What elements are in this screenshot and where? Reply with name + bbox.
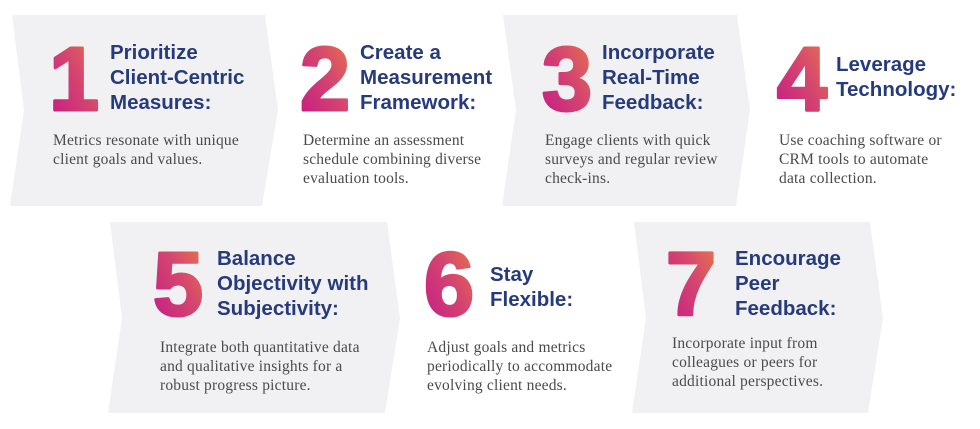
body 4: CRM tools to automate [779,151,928,168]
body 2: schedule combining diverse [303,151,481,168]
body 5: robust progress picture. [160,377,311,394]
title 2: Framework: [360,91,476,114]
body 6 [427,339,612,394]
panel: step 5 background [108,222,400,413]
title 7: Feedback: [735,297,836,320]
step 7 [666,235,841,390]
title 5: Balance [217,247,296,270]
title 1: Prioritize [110,41,198,64]
body 2 [303,132,481,187]
title 6: Stay [490,263,533,286]
body 6: periodically to accommodate [427,358,612,375]
body 4 [779,132,942,187]
title 1: Client-Centric [110,66,244,89]
title 5: Objectivity with [217,272,368,295]
title 7 [735,247,841,320]
body 5 [160,339,360,394]
body 2: evaluation tools. [303,170,409,187]
title 1: Measures: [110,91,211,114]
body 1 [53,132,239,168]
body 6: evolving client needs. [427,377,567,394]
title 4: Leverage [836,53,926,76]
body 3: check-ins. [545,170,610,187]
title 6 [490,263,573,311]
step 1 [49,30,244,168]
body 5: Integrate both quantitative data [160,339,360,356]
body 3 [545,132,718,187]
title 2: Create a [360,41,441,64]
title 5: Subjectivity: [217,297,339,320]
panel: step 7 background [632,222,883,413]
title 2 [360,41,492,114]
body 2: Determine an assessment [303,132,464,149]
body 4: data collection. [779,170,877,187]
title 7: Encourage [735,247,841,270]
number 6: 6 [424,235,474,335]
title 7: Peer [735,272,779,295]
body 7: Incorporate input from [672,335,818,352]
panel: step 1 background [10,15,278,206]
step 5 [153,235,368,394]
body 1: Metrics resonate with unique [53,132,239,149]
step 4 [776,30,956,187]
body 4: Use coaching software or [779,132,942,149]
body 3: Engage clients with quick [545,132,711,149]
number 5: 5 [153,235,203,335]
title 3 [602,41,715,114]
title 3: Real-Time [602,66,700,89]
title 1 [110,41,244,114]
step 6 [424,235,612,394]
panel: step 3 background [502,15,750,206]
number 7: 7 [666,235,716,335]
number 3: 3 [542,30,592,130]
body 7: additional perspectives. [672,373,823,390]
body 7 [672,335,823,390]
step 3 [542,30,718,187]
title 6: Flexible: [490,288,573,311]
body 5: and qualitative insights for a [160,358,342,375]
title 5 [217,247,368,320]
body 6: Adjust goals and metrics [427,339,585,356]
title 3: Feedback: [602,91,703,114]
body 3: surveys and regular review [545,151,718,168]
title 2: Measurement [360,66,492,89]
body 1: client goals and values. [53,151,202,168]
body 7: colleagues or peers for [672,354,817,371]
number 2: 2 [300,30,350,130]
number 1: 1 [49,30,99,130]
title 4 [836,53,956,101]
title 4: Technology: [836,78,956,101]
title 3: Incorporate [602,41,715,64]
number 4: 4 [777,30,827,130]
step 2 [300,30,492,187]
